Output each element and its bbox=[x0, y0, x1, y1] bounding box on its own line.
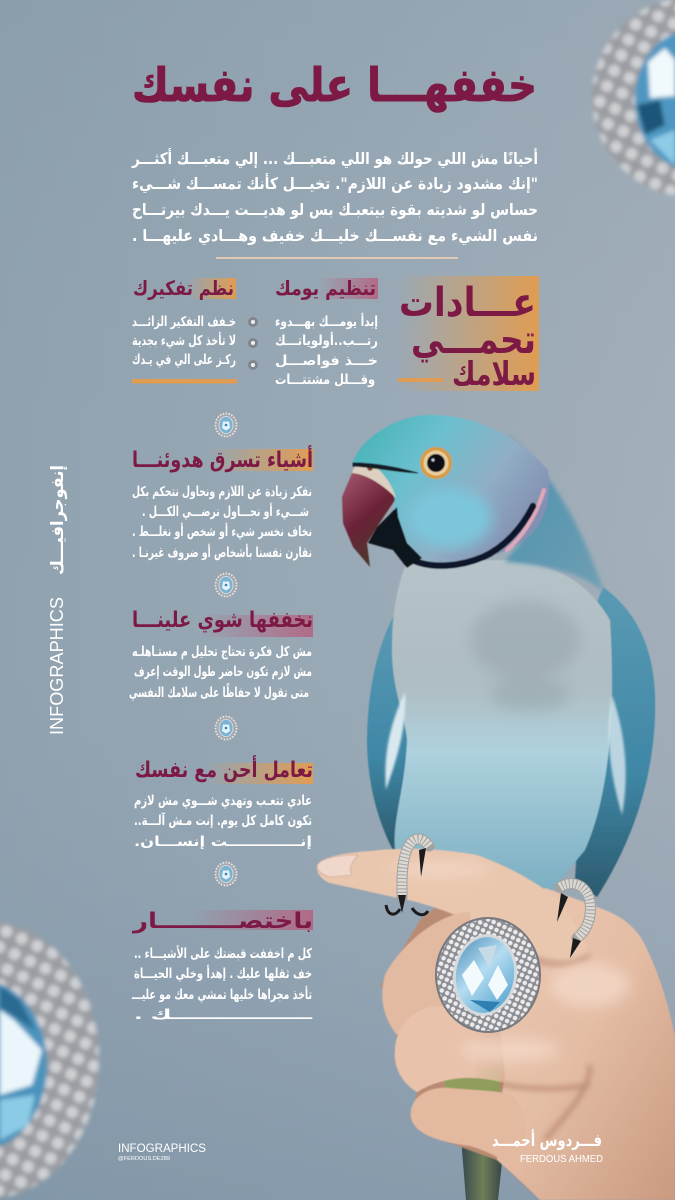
panel: go easy on ourselves: نخففها شوي علينـــا bbox=[132, 608, 313, 633]
parrot body bbox=[392, 560, 612, 890]
panel: organize your thinking: خـفف التفكير الزائـــد bbox=[132, 314, 236, 330]
cere bbox=[352, 463, 396, 498]
back of hand bbox=[480, 888, 675, 1200]
panel: things that steal our calm bbox=[132, 444, 313, 561]
eye bbox=[420, 447, 452, 479]
icon: large ring bottom left bbox=[0, 922, 99, 1198]
icon: gem separator bbox=[214, 572, 238, 598]
intro paragraph: حساس لو شديته بقوة بيتعبـك بس لو هديـــت يـــدك بيرتـــاح bbox=[132, 200, 538, 219]
panel: be gentler with yourself: تكون كامل كل يوم. إنت مـش آلـــة.. bbox=[134, 812, 312, 829]
intro paragraph bbox=[131, 148, 538, 246]
panel: things that steal our calm: نفكر زيادة عن اللازم ونحاول نتحكم بكل bbox=[132, 484, 312, 500]
icon: gem separator bbox=[214, 716, 238, 740]
left foot bbox=[386, 839, 429, 915]
panel: go easy on ourselves: مش كل فكرة تحتاج تحليل م مستـاهلـه bbox=[132, 644, 312, 660]
panel: organize your thinking: نظم تفكيرك bbox=[133, 276, 234, 300]
icon: diamond ring with aquamarine bbox=[435, 917, 541, 1033]
panel: be gentler with yourself bbox=[134, 754, 313, 850]
panel: things that steal our calm: نقارن نفسنا بأشخاص أو ضروف غيرنـا . bbox=[132, 544, 312, 561]
panel: habits heading: تحمـــي bbox=[411, 317, 536, 363]
panel: things that steal our calm: شـــيء أو نحـــاول نرضـــي الكـــل . bbox=[142, 503, 309, 520]
panel: in short: خف ثقلها عليك . إهدأ وخلي الحيـــاة bbox=[134, 965, 312, 982]
divider bbox=[216, 257, 458, 259]
panel: habits heading: عـــادات bbox=[399, 280, 536, 326]
ring finger base bbox=[395, 1006, 475, 1092]
panel: in short: باختصـــــــــار bbox=[132, 909, 313, 934]
little finger bbox=[411, 1088, 526, 1170]
parrot right wing bbox=[575, 587, 655, 897]
intro paragraph: نفس الشيء مع نفســـك خليـــك خفيف وهـــادي عليهـــا . bbox=[132, 226, 538, 246]
nostril bbox=[367, 465, 373, 471]
intro paragraph: أحيانًا مش اللي حولك هو اللي متعبـــك ... إلي متعبـــك أكثـــر bbox=[131, 148, 538, 169]
panel: organize your day: إبدأ يومـــك بهـــدوء bbox=[275, 313, 378, 330]
parrot left wing bbox=[367, 617, 420, 850]
middle finger bbox=[382, 912, 475, 1035]
panel: be gentler with yourself: إنـــــــــــــت إنســـان. bbox=[134, 834, 312, 850]
panel: go easy on ourselves: متى تقول لا حفاظًا على سلامك النفسي bbox=[129, 682, 309, 701]
parrot wings and body bbox=[342, 415, 655, 897]
hand highlights bbox=[390, 862, 630, 1062]
icon: gem separator bbox=[214, 412, 238, 438]
eye stripe bbox=[353, 463, 418, 473]
index finger bbox=[317, 849, 590, 960]
icon: list bullets bbox=[248, 317, 258, 370]
title: خففهـــا على نفسك bbox=[132, 58, 537, 112]
panel: habits heading bbox=[397, 276, 539, 393]
footer author: فـــردوس أحمـــد bbox=[492, 1129, 602, 1151]
panel: in short: ــــــــــــــــــك . bbox=[134, 1007, 313, 1023]
panel: organize your thinking: لا تأخذ كل شيء بجدية bbox=[132, 332, 236, 349]
panel: organize your day bbox=[275, 276, 378, 388]
tail bbox=[460, 1125, 506, 1200]
footer brand: @FERDOUS.DE289 bbox=[118, 1156, 170, 1162]
panel: go easy on ourselves: مش لازم تكون حاضر طول الوقت إعرف bbox=[134, 664, 312, 680]
green tail gap bbox=[445, 1068, 500, 1094]
panel: in short: كل م اخففت قبضتك على الأشيـــاء .. bbox=[134, 945, 312, 962]
right foot bbox=[557, 884, 590, 958]
panel: in short: تأخذ مجراها خليها تمشي معك مو عليـــ bbox=[131, 986, 312, 1003]
footer author: FERDOUS AHMED bbox=[520, 1154, 603, 1165]
panel: organize your day: رتـــب..أولوياتـــك bbox=[275, 332, 378, 349]
side label english: INFOGRAPHICS bbox=[46, 597, 67, 735]
footer brand bbox=[118, 1143, 206, 1162]
collar bbox=[410, 490, 544, 566]
hand shadow base bbox=[381, 880, 675, 1200]
footer brand: INFOGRAPHICS bbox=[118, 1143, 206, 1155]
illustration: parrot on hand bbox=[317, 415, 675, 1200]
panel: be gentler with yourself: عادي تتعـب وتهدي شـــوي مش لازم bbox=[134, 793, 312, 809]
hand creases bbox=[500, 950, 590, 1140]
parrot neck and back bbox=[505, 432, 604, 592]
panel: in short bbox=[131, 909, 313, 1023]
wing highlights bbox=[385, 692, 626, 815]
under-beak black bbox=[368, 507, 422, 568]
hand bbox=[317, 849, 675, 1200]
panel: things that steal our calm: أشياء تسرق هدوئنـــا bbox=[132, 444, 313, 473]
nail bbox=[317, 855, 358, 877]
panel: organize your thinking bbox=[132, 276, 237, 384]
panel: be gentler with yourself: تعامل أحن مع نفسك bbox=[135, 754, 313, 783]
ring finger bbox=[395, 1006, 604, 1092]
panel: organize your day: وقـــلل مشتتـــات bbox=[275, 372, 375, 388]
parrot head bbox=[352, 415, 549, 563]
side label arabic: إنفوجرافيـــك bbox=[48, 465, 68, 575]
beak bbox=[342, 473, 395, 567]
panel: things that steal our calm: نخاف نخسر شيء أو شخص أو نغلـــط . bbox=[132, 523, 312, 540]
panel: habits heading: سلامك bbox=[452, 354, 536, 393]
footer author bbox=[492, 1129, 603, 1165]
panel: go easy on ourselves bbox=[129, 608, 313, 701]
cheek bbox=[408, 488, 492, 548]
panel: organize your thinking: ركـز على الي في يـدك bbox=[132, 352, 236, 368]
icon: gem separator bbox=[214, 862, 238, 886]
icon: large ring top right bbox=[592, 0, 675, 197]
panel: organize your day: تنظيم يومك bbox=[275, 276, 376, 300]
panel: organize your day: خـــذ فواصـــل bbox=[275, 353, 378, 369]
intro paragraph: "إنك مشدود زيادة عن اللازم". تخيـــل كأنك تمســـك شـــيء bbox=[132, 173, 538, 194]
parrot chest shading bbox=[470, 600, 580, 711]
